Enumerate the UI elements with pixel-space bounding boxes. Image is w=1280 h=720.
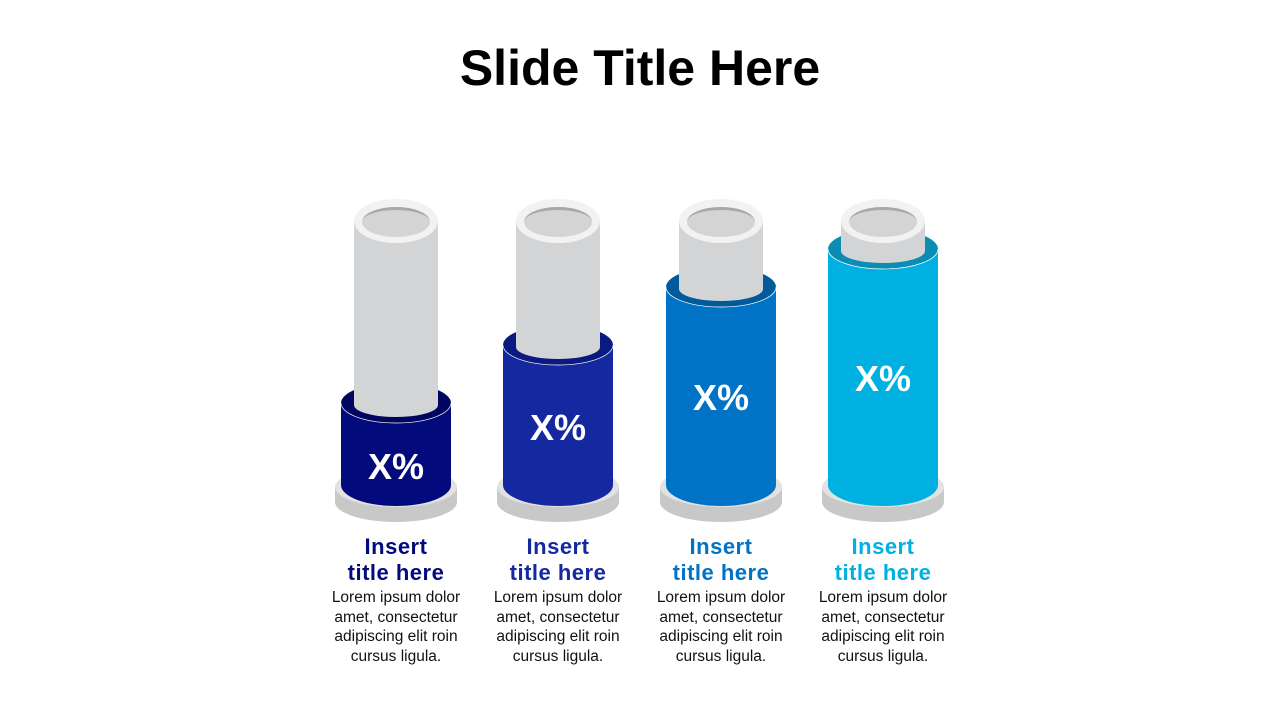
cylinder 1 [335, 199, 457, 522]
cylinder 3: X% [693, 377, 749, 418]
cylinder 4 [822, 199, 944, 522]
caption 4 [819, 534, 947, 664]
caption 2: Lorem ipsum dolor amet, consectetur adipiscing elit roin cursus ligula. [494, 589, 622, 664]
caption 4: Insert [852, 534, 914, 559]
cylinder 2: X% [530, 407, 586, 448]
caption 4: Lorem ipsum dolor amet, consectetur adipiscing elit roin cursus ligula. [819, 589, 947, 664]
caption 1: title here [348, 560, 444, 585]
caption 3 [657, 534, 785, 664]
caption 1: Insert [365, 534, 427, 559]
caption 2 [494, 534, 622, 664]
caption 4: title here [835, 560, 931, 585]
caption 2: title here [510, 560, 606, 585]
caption 3: title here [673, 560, 769, 585]
cylinder 4: X% [855, 358, 911, 399]
cylinder 1: X% [368, 446, 424, 487]
cylinder 2 [497, 199, 619, 522]
title: Slide Title Here [460, 40, 820, 96]
caption 1 [332, 534, 460, 664]
caption 1: Lorem ipsum dolor amet, consectetur adipiscing elit roin cursus ligula. [332, 589, 460, 664]
caption 2: Insert [527, 534, 589, 559]
cylinder 3 [660, 199, 782, 522]
caption 3: Insert [690, 534, 752, 559]
caption 3: Lorem ipsum dolor amet, consectetur adipiscing elit roin cursus ligula. [657, 589, 785, 664]
